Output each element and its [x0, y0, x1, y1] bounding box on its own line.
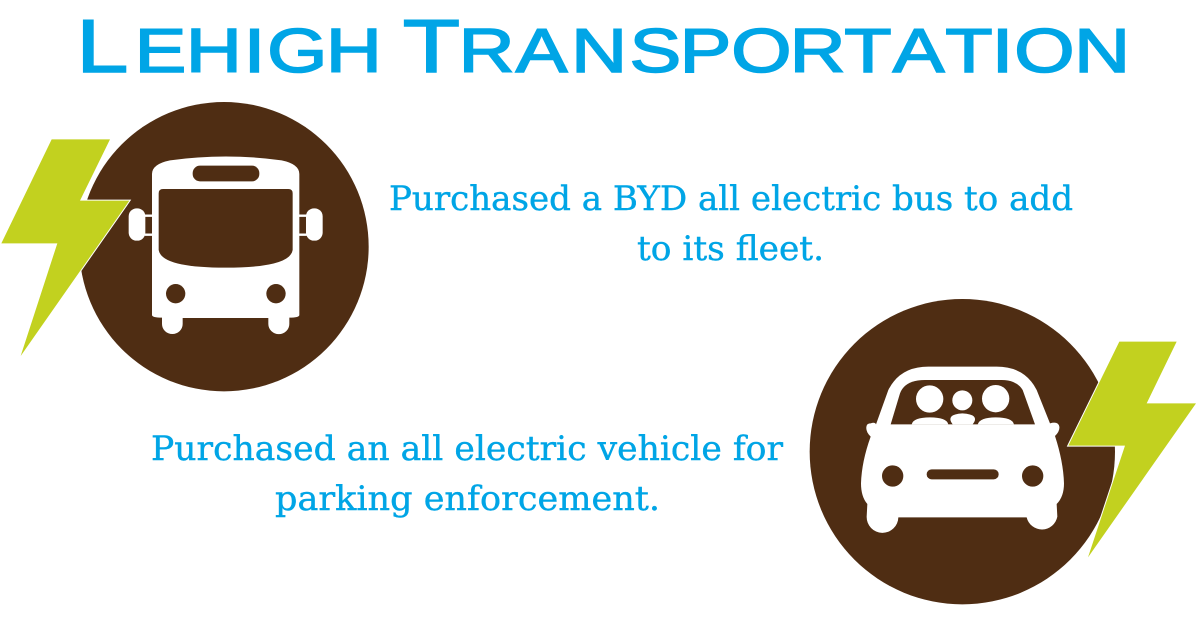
title: RANSPORTATION — [459, 15, 1130, 85]
icon: car — [861, 367, 1064, 533]
icon: lightning bolt — [1068, 342, 1196, 557]
text: bus description — [389, 179, 1073, 269]
title: T — [403, 4, 460, 88]
title: EHIGH — [135, 15, 382, 85]
icon: bus — [129, 156, 323, 334]
brown circle — [79, 102, 369, 391]
text: car description — [151, 429, 784, 519]
panel: electric bus icon — [1, 102, 369, 391]
text: bus description: to its fleet. — [637, 229, 824, 269]
text: car description: Purchased an all electric vehicle for — [151, 429, 784, 469]
text: bus description: Purchased a BYD all electric bus to add — [389, 179, 1073, 219]
title: L — [76, 4, 128, 88]
brown circle — [810, 299, 1115, 604]
title — [76, 4, 1130, 88]
text: car description: parking enforcement. — [275, 479, 660, 519]
icon: lightning bolt — [1, 139, 129, 356]
panel: electric car icon — [810, 299, 1196, 604]
